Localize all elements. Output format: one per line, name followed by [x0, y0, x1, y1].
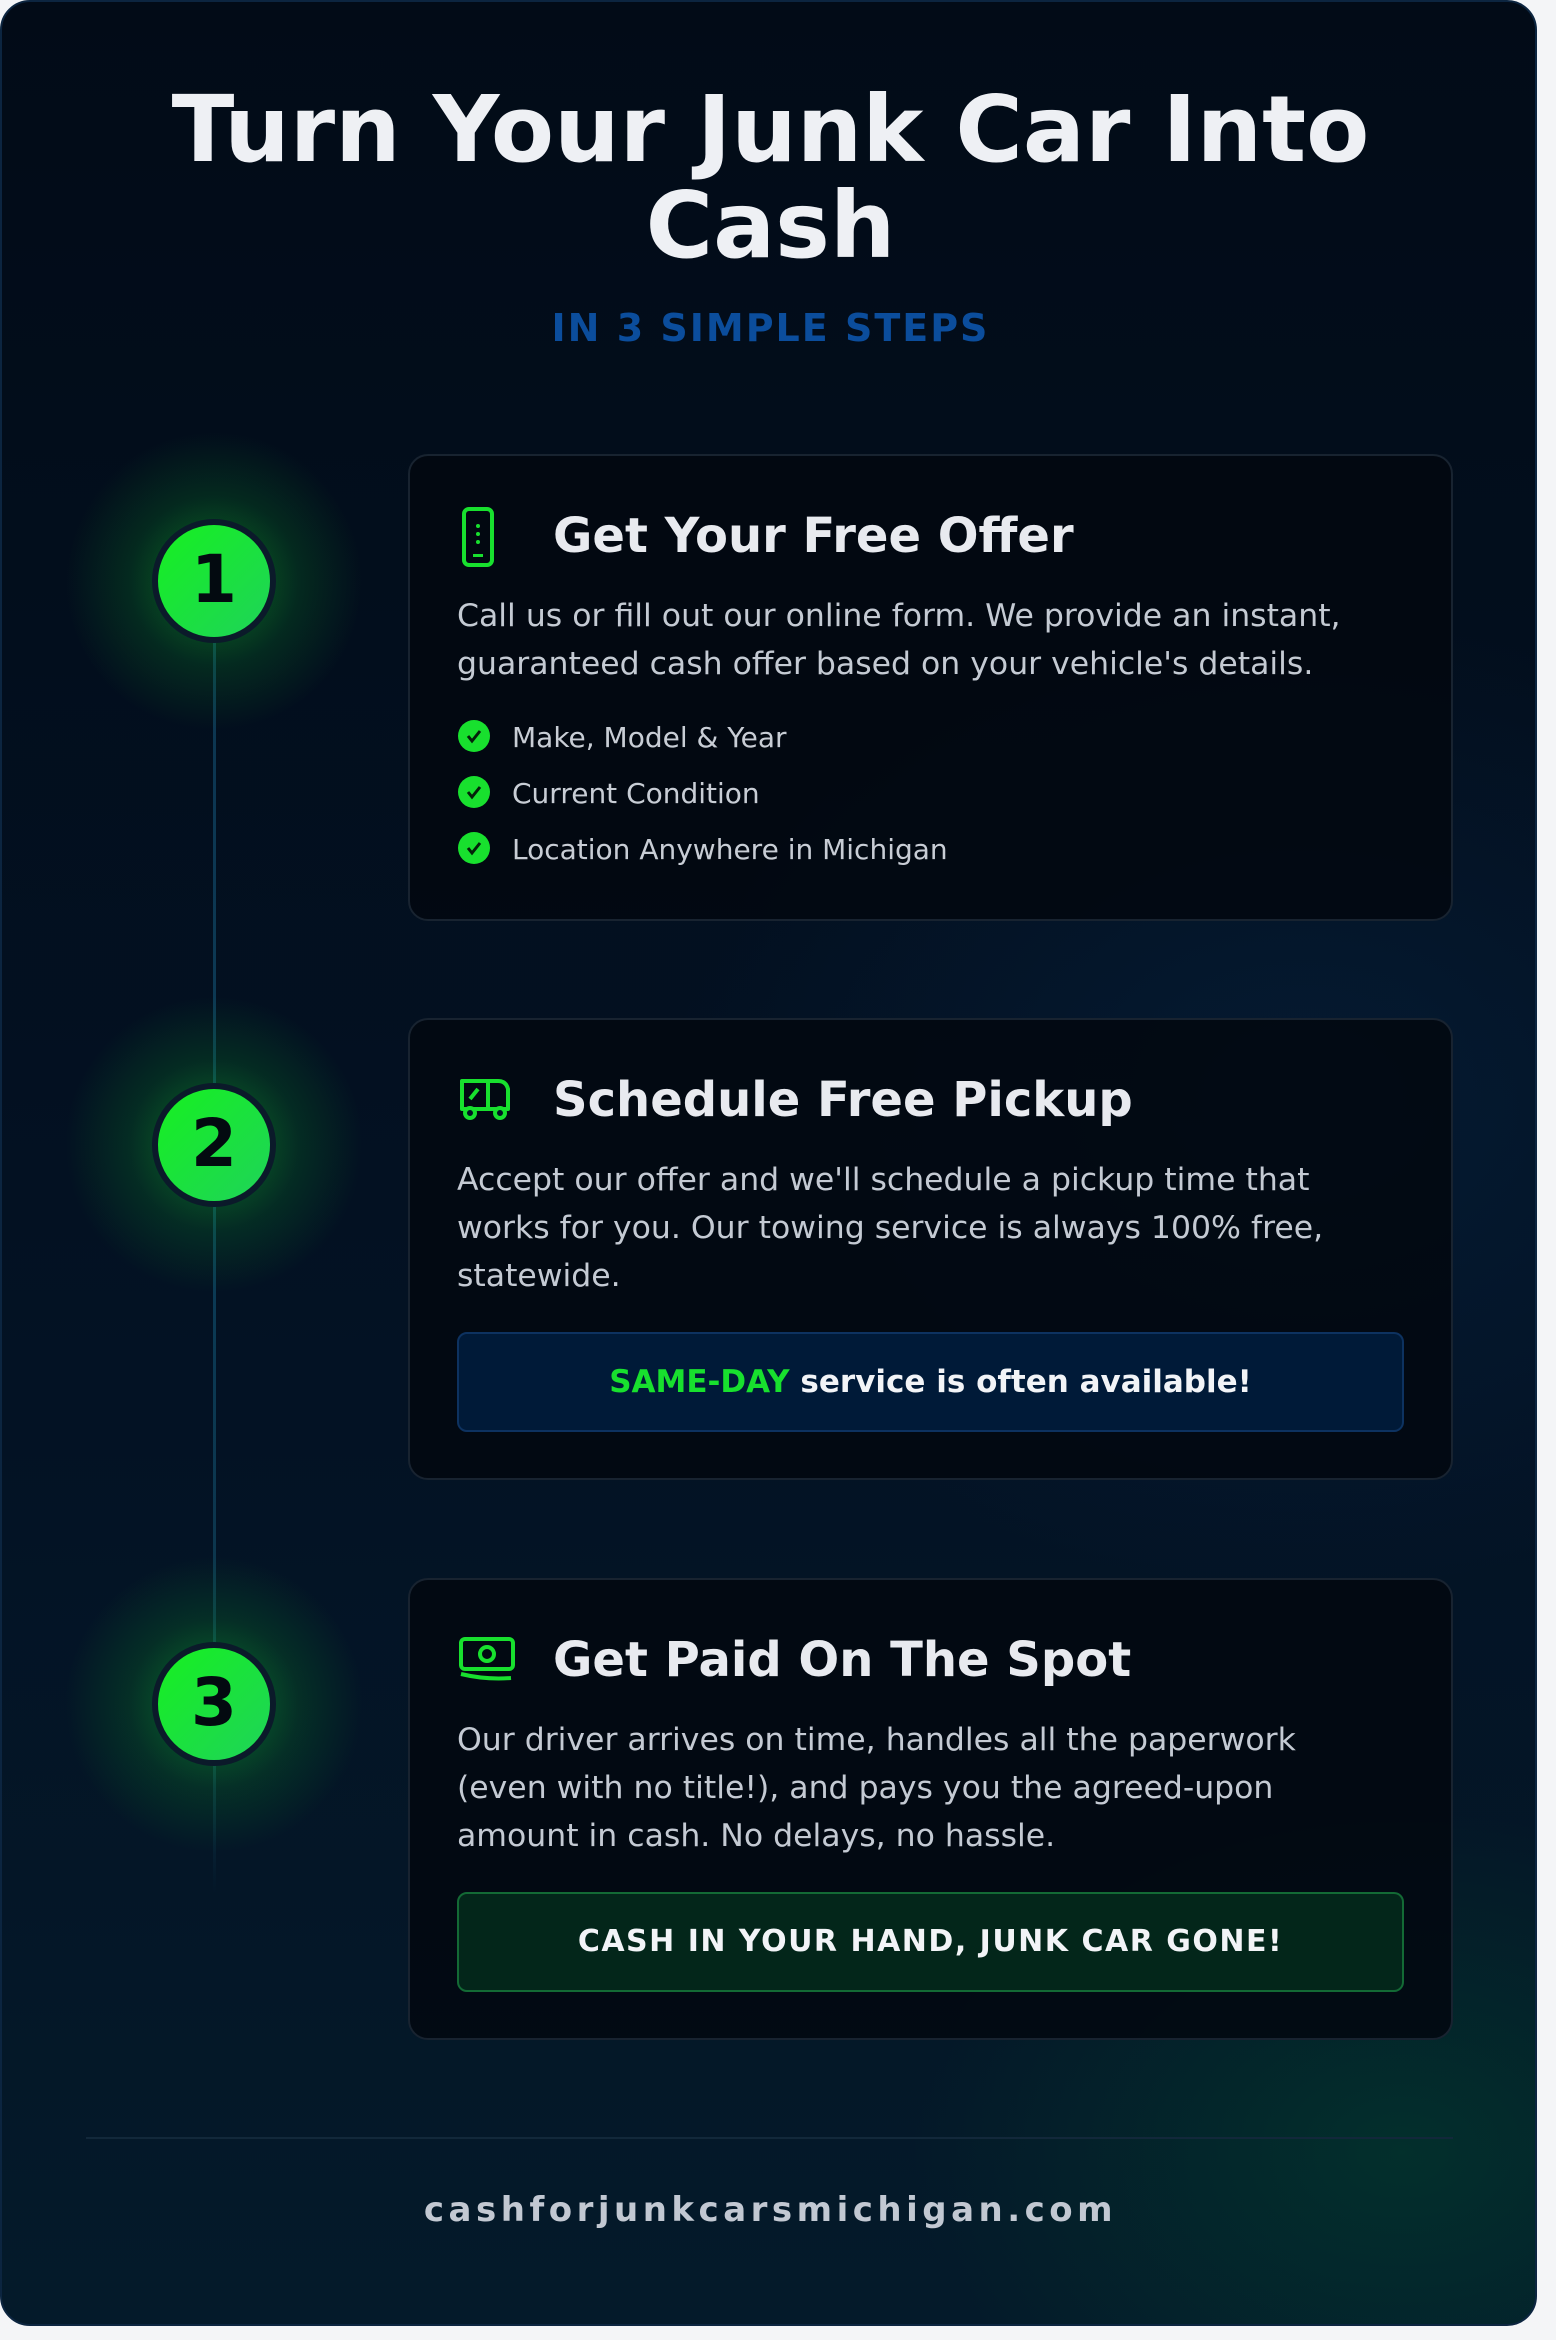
checklist: Make, Model & Year	[512, 721, 787, 754]
panel: step 1	[408, 454, 1453, 921]
panel: step 2	[408, 1018, 1453, 1480]
title: Cash	[646, 172, 895, 279]
step circle 1: 1	[191, 541, 237, 618]
step circle 3	[152, 1642, 276, 1766]
glow 3	[64, 1554, 364, 1854]
step circle 2	[152, 1083, 276, 1207]
checklist: Location Anywhere in Michigan	[512, 833, 948, 866]
callout: cash	[457, 1892, 1404, 1992]
step circle 2: 2	[191, 1105, 237, 1182]
title: Turn Your Junk Car Into	[172, 76, 1369, 183]
title	[172, 76, 1369, 279]
icon: cash	[459, 1637, 515, 1680]
callout: same-day	[457, 1332, 1404, 1432]
heading: Schedule Free Pickup	[553, 1072, 1133, 1128]
footer url: cashforjunkcarsmichigan.com	[424, 2190, 1117, 2230]
subtitle: IN 3 SIMPLE STEPS	[552, 306, 989, 350]
glow 2	[64, 995, 364, 1295]
checklist	[458, 720, 948, 866]
heading: Get Paid On The Spot	[553, 1632, 1131, 1688]
glow 1	[64, 431, 364, 731]
text: Accept our offer and we'll schedule a pickup time that works for you. Our towing service is always 100% free, statewide.	[457, 1162, 1323, 1294]
timeline line	[213, 602, 216, 1892]
callout: cash: CASH IN YOUR HAND, JUNK CAR GONE!	[578, 1924, 1283, 1959]
checklist: Current Condition	[512, 777, 760, 810]
panel: step 3	[408, 1578, 1453, 2040]
text: Call us or fill out our online form. We provide an instant, guaranteed cash offer based on your vehicle's details.	[457, 598, 1341, 682]
icon: tow truck	[460, 1079, 510, 1120]
callout: same-day: SAME-DAY service is often available!	[609, 1364, 1252, 1400]
icon: phone	[462, 507, 494, 567]
heading: Get Your Free Offer	[553, 508, 1074, 564]
step circle 3: 3	[191, 1664, 237, 1741]
step circle 1	[152, 519, 276, 643]
text: Our driver arrives on time, handles all the paperwork (even with no title!), and pays you the agreed-upon amount in cash. No delays, no hassle.	[457, 1722, 1296, 1854]
